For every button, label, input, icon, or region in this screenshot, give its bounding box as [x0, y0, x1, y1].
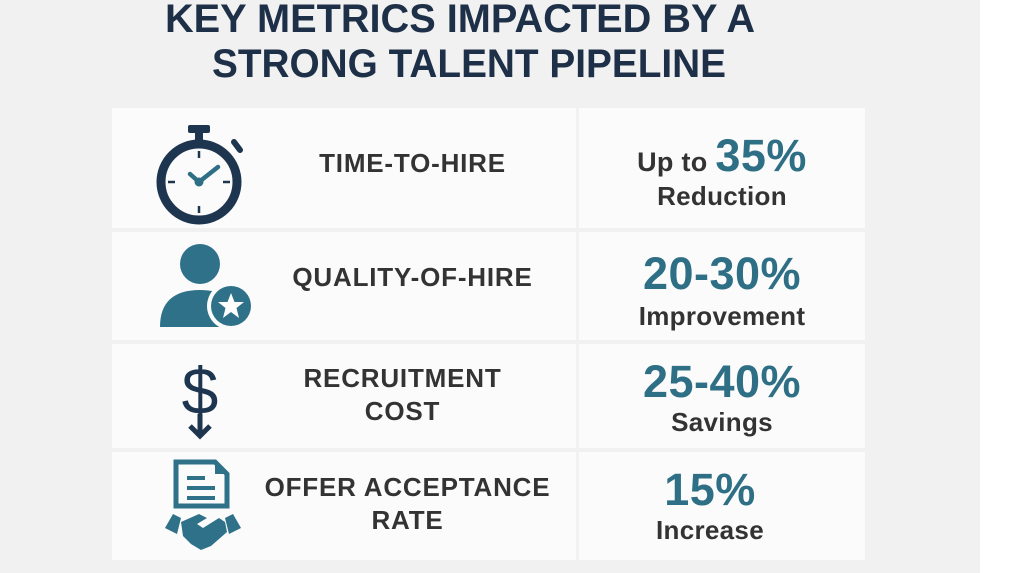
- label: offer acceptance rate: [265, 472, 550, 535]
- icon: person with star: [160, 244, 251, 327]
- value: 20-30%: Improvement: [639, 301, 805, 331]
- label: offer acceptance rate: OFFER ACCEPTANCE: [265, 472, 550, 502]
- value: 35%: Up to 35%: [637, 130, 807, 181]
- value: 15%: Increase: [656, 515, 764, 545]
- label: recruitment cost: [303, 363, 502, 426]
- value: 25-40%: 25-40%: [643, 356, 801, 407]
- value: 25-40%: Savings: [671, 407, 773, 437]
- value: 15%: 15%: [664, 464, 756, 515]
- value: 35%: Reduction: [657, 181, 787, 211]
- label: offer acceptance rate: RATE: [371, 505, 444, 535]
- value: 25-40%: [643, 356, 801, 437]
- value: 15%: [656, 464, 764, 545]
- icon: dollar down: $: [182, 354, 218, 428]
- label: time-to-hire: TIME-TO-HIRE: [319, 148, 506, 178]
- title: STRONG TALENT PIPELINE: [212, 42, 726, 86]
- icon: stopwatch: [156, 125, 243, 224]
- value: 20-30%: 20-30%: [643, 248, 801, 299]
- icon: contract handshake: [165, 460, 241, 550]
- label: quality-of-hire: QUALITY-OF-HIRE: [292, 262, 533, 292]
- value: 35%: [637, 130, 807, 211]
- title: [165, 0, 755, 86]
- value: 20-30%: [639, 248, 805, 331]
- label: recruitment cost: COST: [365, 396, 440, 426]
- label: recruitment cost: RECRUITMENT: [303, 363, 502, 393]
